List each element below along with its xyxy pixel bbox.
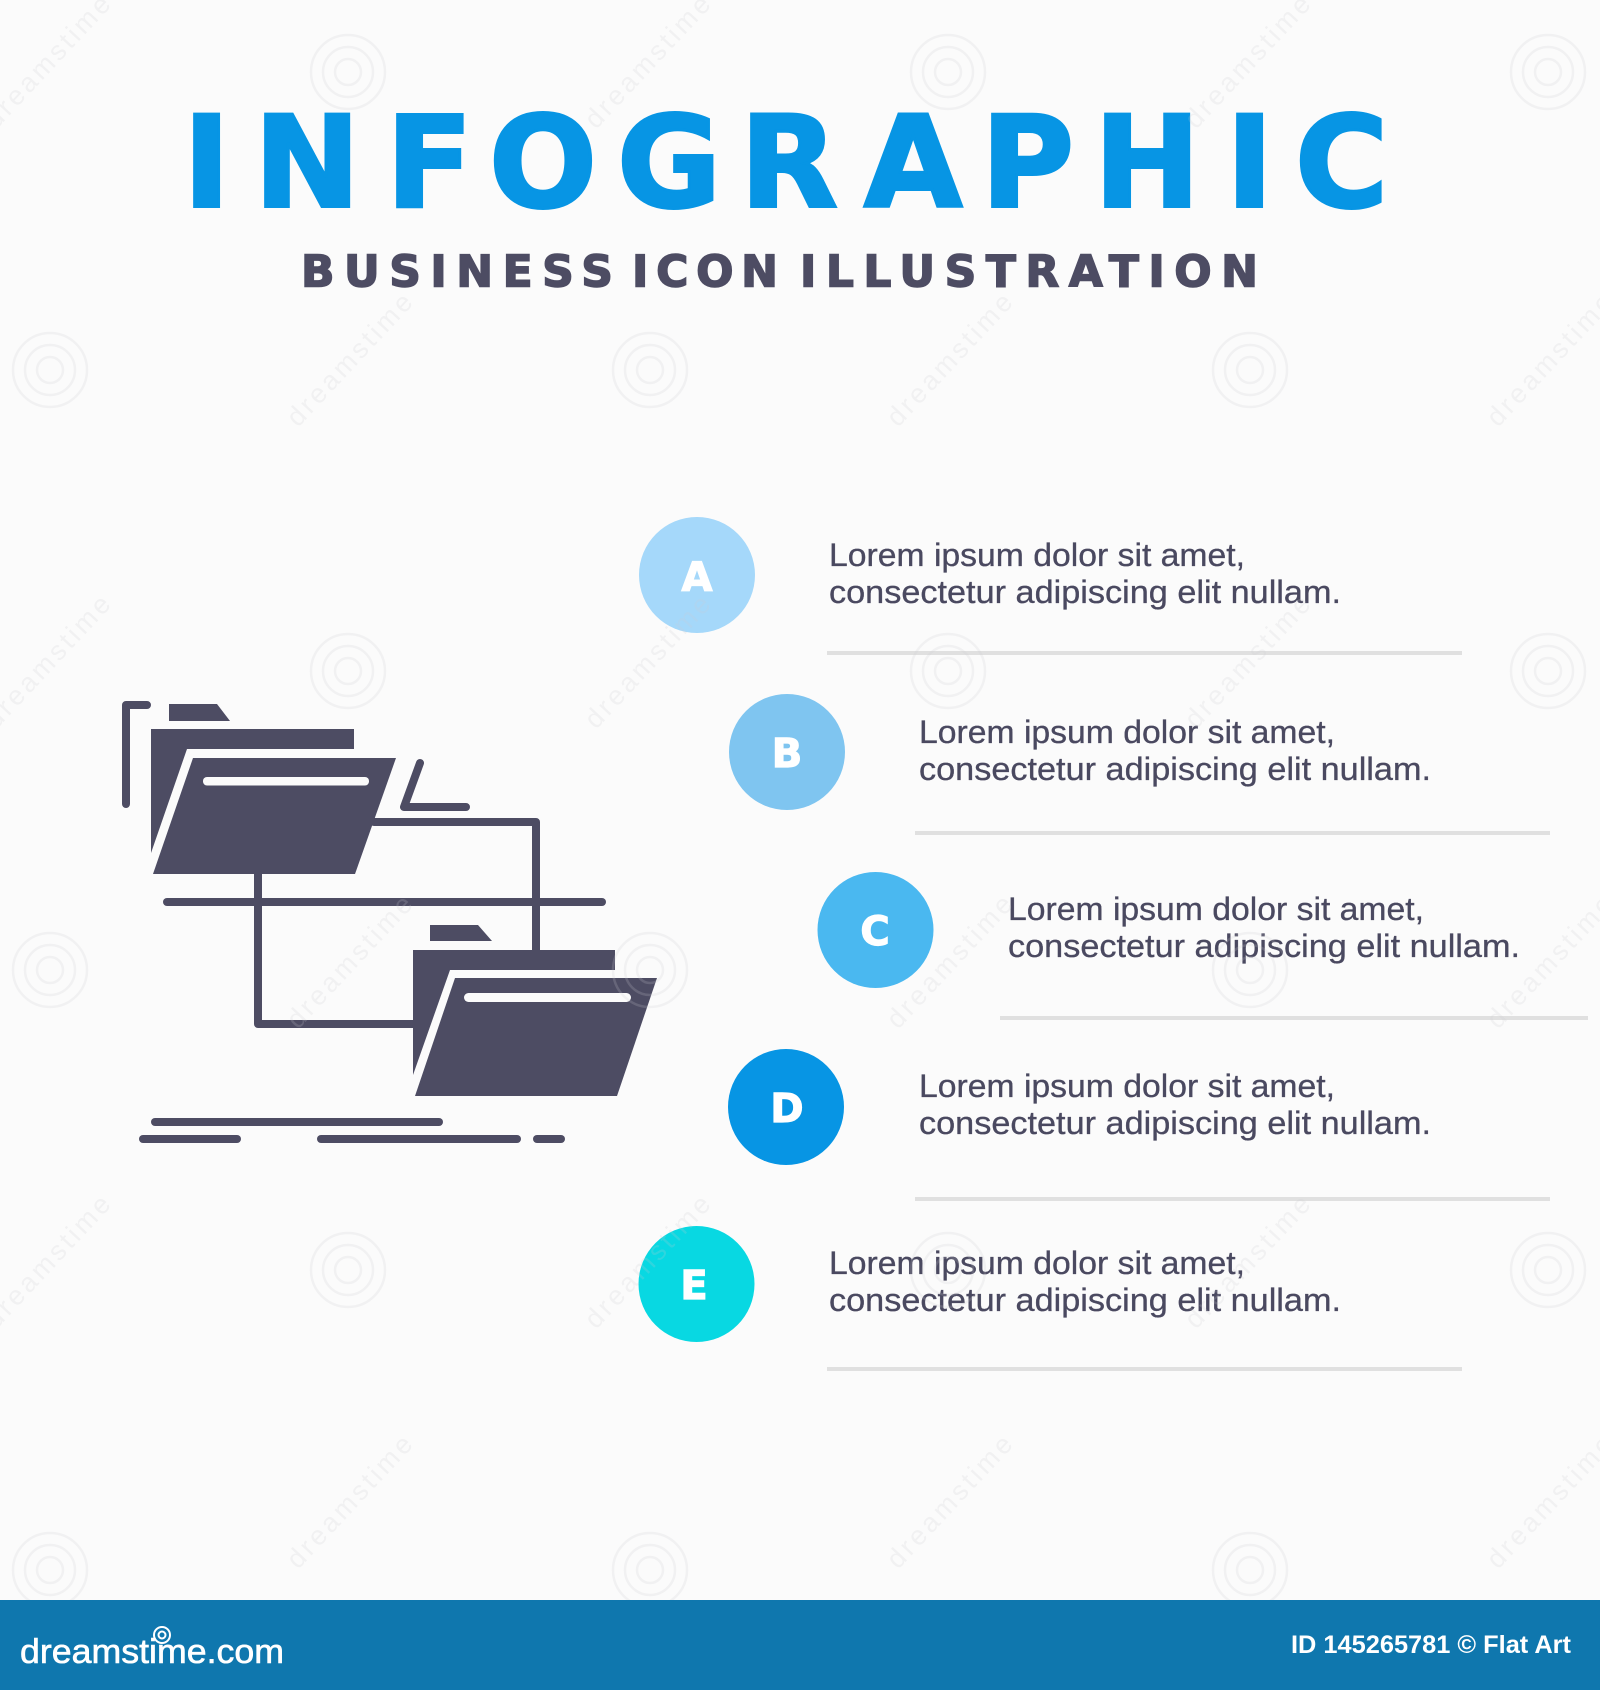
folder: bottom <box>413 925 657 1096</box>
text A: consectetur adipiscing elit nullam. <box>829 574 1341 610</box>
footer logo: dreamstime.com <box>20 1633 284 1671</box>
subtitle: BUSINESS <box>301 246 613 298</box>
watermark pattern: dreamstime <box>280 1429 418 1574</box>
text A: Lorem ipsum dolor sit amet, <box>829 537 1245 573</box>
watermark pattern: dreamstime <box>1178 589 1316 734</box>
text E: Lorem ipsum dolor sit amet, <box>829 1245 1245 1281</box>
badge B <box>729 694 845 810</box>
badge A <box>639 517 755 633</box>
text C <box>1008 891 1520 964</box>
subtitle <box>301 246 1258 298</box>
badge A: A <box>682 555 713 601</box>
watermark pattern: dreamstime <box>280 889 418 1034</box>
step B <box>729 694 1550 835</box>
step C <box>818 872 1588 1020</box>
badge C <box>818 872 934 988</box>
folder: top <box>151 704 396 874</box>
text C: Lorem ipsum dolor sit amet, <box>1008 891 1424 927</box>
badge B: B <box>772 731 802 777</box>
badge E: E <box>680 1263 708 1309</box>
text A <box>829 537 1341 610</box>
text D <box>919 1068 1431 1141</box>
watermark pattern: dreamstime <box>880 889 1018 1034</box>
watermark pattern: dreamstime <box>280 287 418 432</box>
badge D <box>728 1049 844 1165</box>
footer credit: ID 145265781 © Flat Art <box>1291 1631 1572 1659</box>
text E: consectetur adipiscing elit nullam. <box>829 1282 1341 1318</box>
step E <box>638 1226 1462 1371</box>
connector lines <box>126 705 602 1139</box>
watermark pattern: dreamstime <box>578 1189 716 1334</box>
watermark pattern: dreamstime <box>578 589 716 734</box>
footer bar <box>0 1600 1600 1690</box>
text B <box>919 714 1431 787</box>
icon: folder hierarchy <box>126 704 657 1139</box>
subtitle: ILLUSTRATION <box>800 246 1258 298</box>
text D: Lorem ipsum dolor sit amet, <box>919 1068 1335 1104</box>
subtitle: ICON <box>632 246 778 298</box>
step A <box>639 517 1462 655</box>
watermark pattern: dreamstime <box>880 1429 1018 1574</box>
watermark pattern: dreamstime <box>1178 1189 1316 1334</box>
step D <box>728 1049 1550 1201</box>
title: INFOGRAPHIC <box>183 88 1388 236</box>
watermark pattern: dreamstime <box>880 287 1018 432</box>
text E <box>829 1245 1341 1318</box>
text B: consectetur adipiscing elit nullam. <box>919 751 1431 787</box>
badge D: D <box>770 1086 804 1132</box>
text D: consectetur adipiscing elit nullam. <box>919 1105 1431 1141</box>
text B: Lorem ipsum dolor sit amet, <box>919 714 1335 750</box>
badge C: C <box>860 909 890 955</box>
text C: consectetur adipiscing elit nullam. <box>1008 928 1520 964</box>
badge E <box>638 1226 754 1342</box>
